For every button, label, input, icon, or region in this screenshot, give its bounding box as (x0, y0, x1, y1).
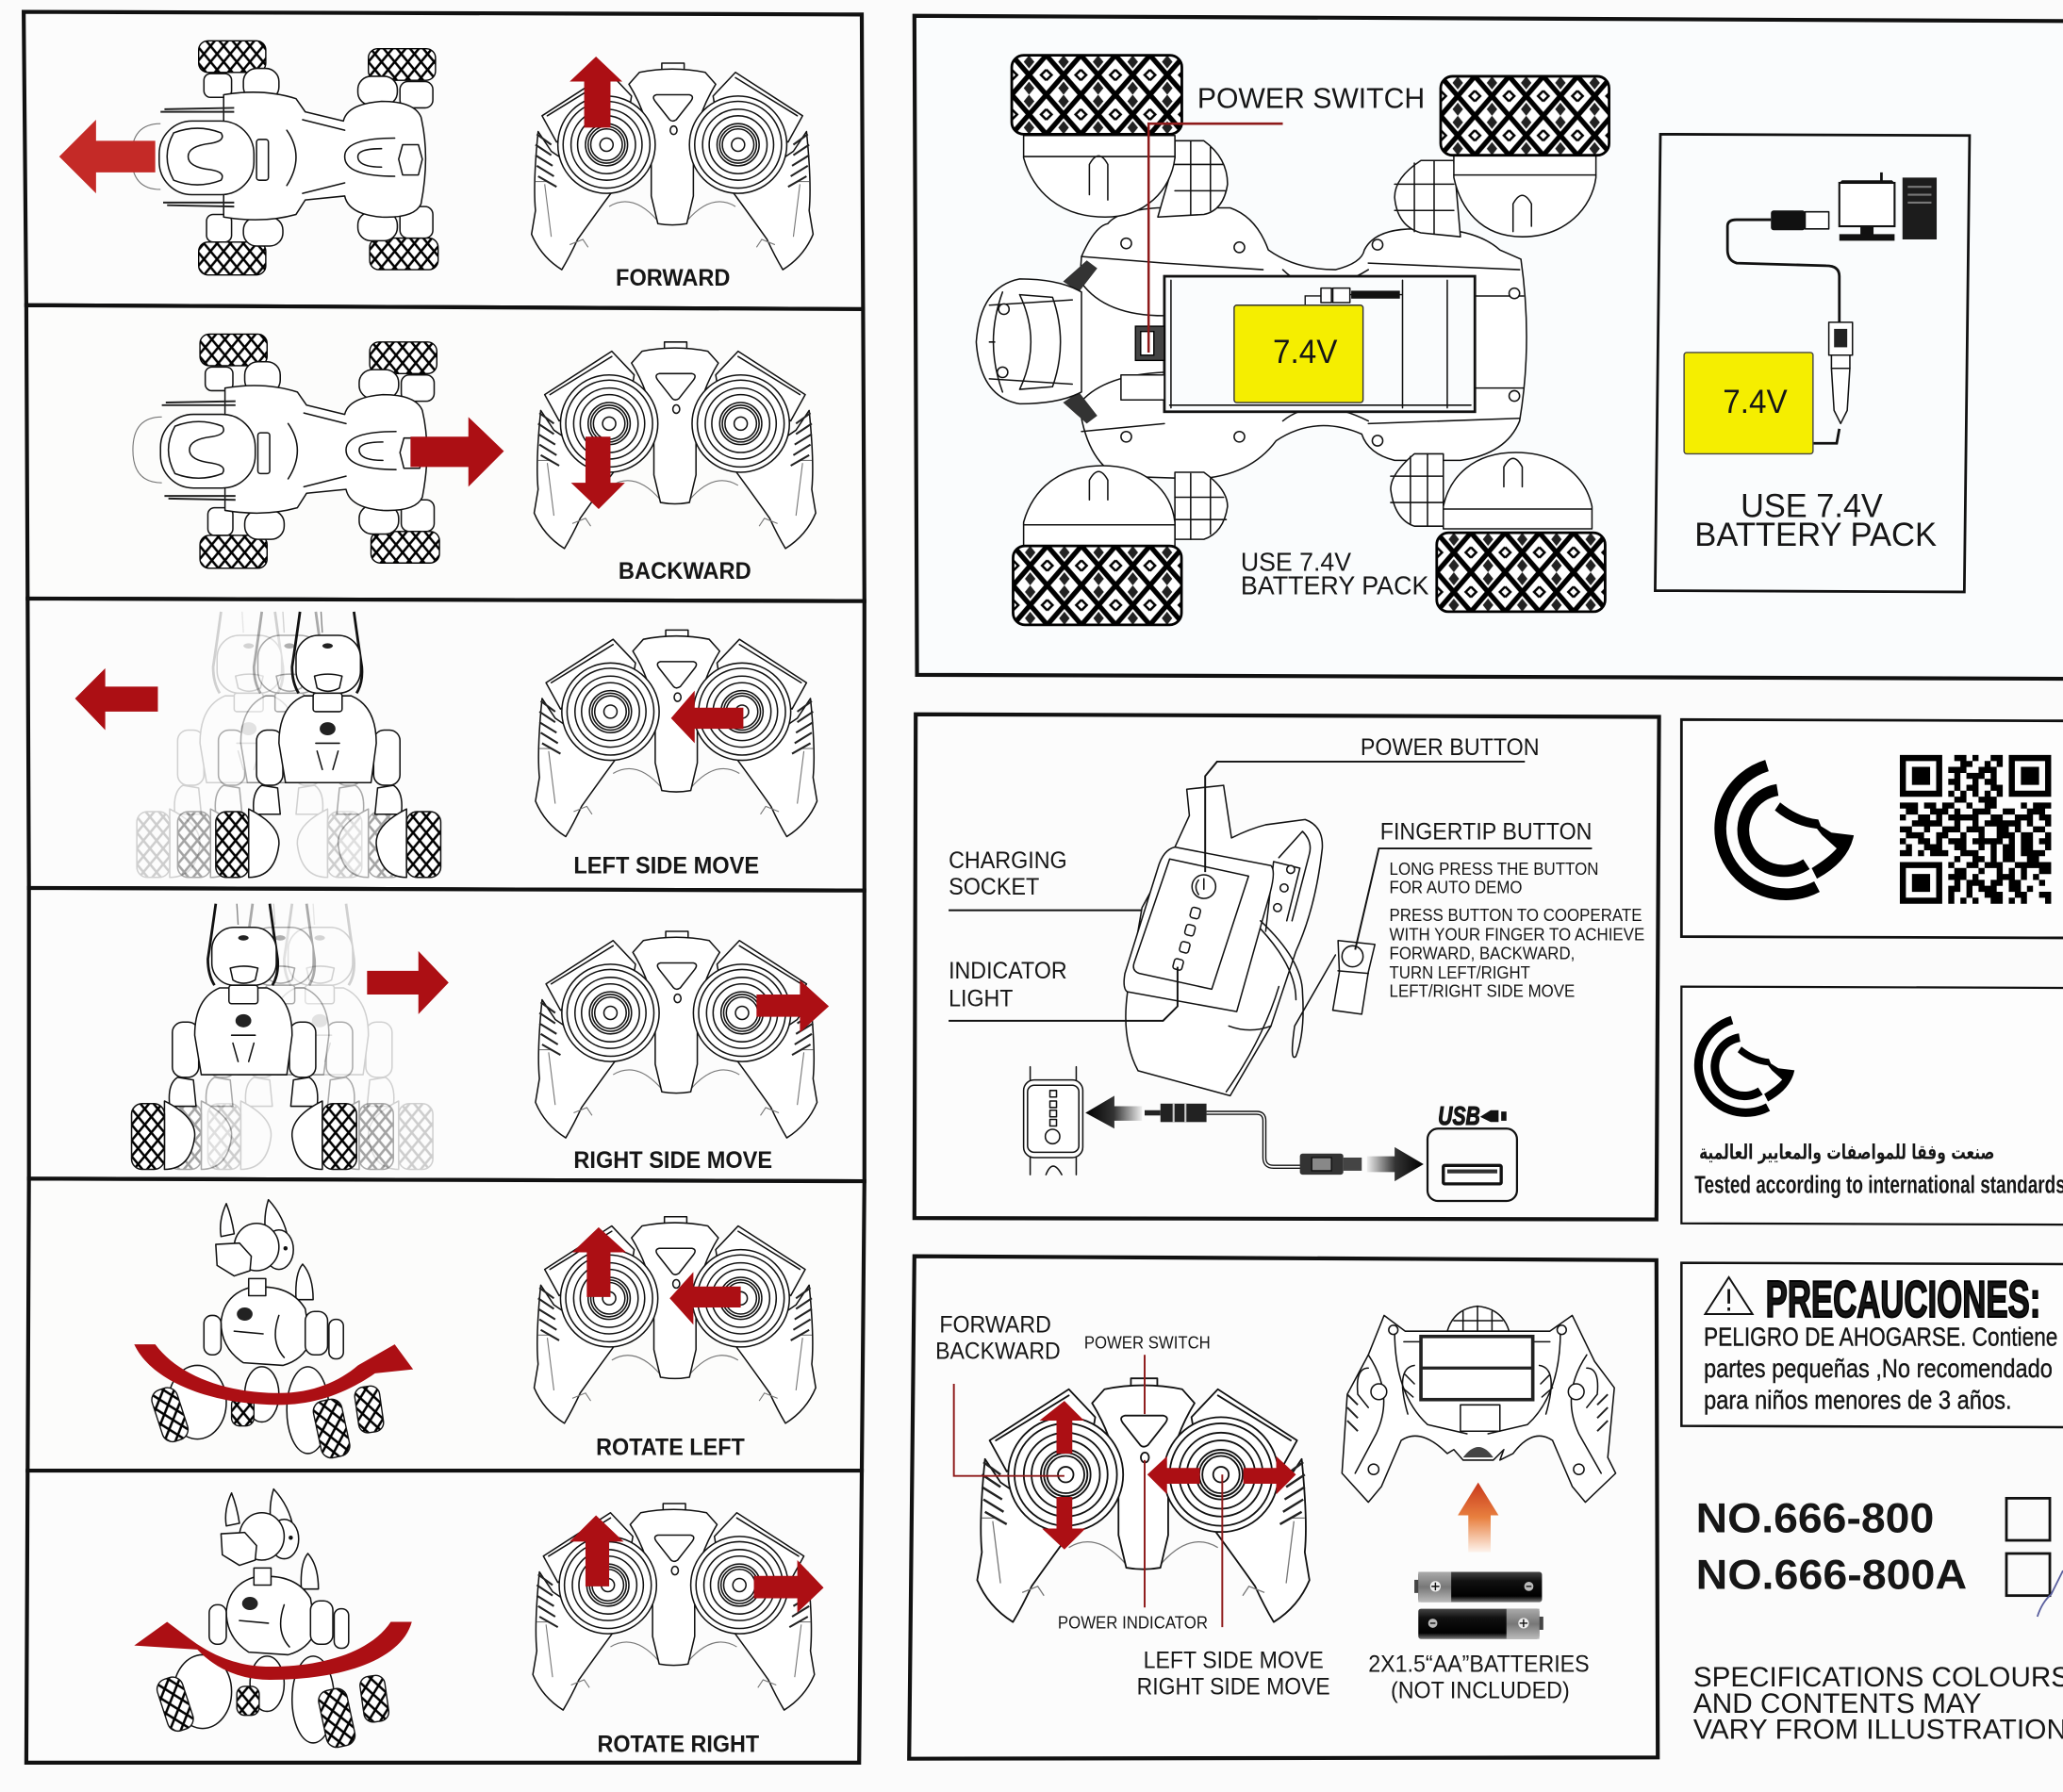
fingertip instructions: TURN LEFT/RIGHT (1390, 963, 1530, 982)
arrow: curved rotate right (134, 1622, 412, 1680)
arabic standards text: صنعت وفقا للمواصفات والمعايير العالمية (1699, 1142, 1994, 1164)
label indicator light: INDICATOR (949, 958, 1067, 984)
inset panel: usb charging (1655, 134, 1970, 592)
label indicator light (949, 958, 1178, 1021)
label use 7.4V battery pack (1241, 548, 1429, 600)
logo small (1698, 1020, 1794, 1112)
arrow: to usb port (1367, 1147, 1424, 1181)
label right side move: RIGHT SIDE MOVE (573, 1147, 772, 1174)
label forward backward: BACKWARD (935, 1338, 1061, 1364)
controller rotate right (533, 1504, 815, 1710)
arrow: stick up (569, 57, 622, 127)
arrow: backward body (410, 417, 503, 486)
checkbox 666-800 (2006, 1498, 2050, 1540)
specifications disclaimer: AND CONTENTS MAY (1693, 1688, 1981, 1719)
dog front view sliding right (132, 904, 433, 1170)
label use 7.4V battery pack: USE 7.4V (1241, 548, 1351, 577)
panel: right side move (29, 888, 865, 1181)
arrow: stick up (572, 1227, 626, 1297)
label batteries (1368, 1652, 1590, 1703)
fingertip instructions (1390, 860, 1644, 1001)
label power switch: POWER SWITCH (1197, 81, 1425, 114)
charging cable (1145, 1104, 1362, 1175)
panel: battery installation (915, 16, 2063, 679)
battery charger connector (1829, 322, 1853, 423)
controller right side move (536, 931, 817, 1138)
model numbers: NO.666-800A (1696, 1553, 1967, 1599)
controller rotate left (535, 1217, 816, 1423)
dog top view moving forward (132, 41, 438, 275)
arrow: forward body (59, 120, 156, 193)
controller forward (532, 63, 813, 270)
arrow: stick right (754, 1560, 824, 1613)
label forward: FORWARD (616, 265, 730, 291)
panel: remote controller (909, 1257, 1658, 1759)
controller left side move (536, 630, 817, 836)
battery pack: 7.4V inset (1684, 353, 1813, 453)
usb port icon: USB (1438, 1101, 1480, 1130)
specifications disclaimer (1693, 1662, 2063, 1746)
label power button: POWER BUTTON (1361, 734, 1540, 761)
fingertip instructions: FOR AUTO DEMO (1390, 878, 1522, 896)
label power button (1205, 734, 1540, 872)
specifications disclaimer: VARY FROM ILLUSTRATION (1693, 1715, 2063, 1746)
arrow: right body (367, 951, 449, 1014)
dog front view sliding left (137, 612, 440, 878)
dog three-quarter view (149, 1200, 385, 1460)
label charging socket: CHARGING (949, 847, 1067, 874)
label batteries: 2X1.5“AA”BATTERIES (1368, 1652, 1590, 1678)
label use 7.4V battery pack inset (1694, 487, 1937, 553)
label left right side move: LEFT SIDE MOVE (1144, 1647, 1324, 1673)
battery pack: 7.4V (1234, 305, 1363, 403)
watch illustration (1124, 785, 1375, 1095)
label left right side move: RIGHT SIDE MOVE (1137, 1673, 1330, 1700)
label batteries: (NOT INCLUDED) (1391, 1677, 1570, 1703)
dog underside with battery (976, 56, 1609, 625)
computer icon (1840, 173, 1937, 240)
battery pack: 7.4V: 7.4V (1273, 334, 1338, 370)
label indicator light: LIGHT (949, 986, 1013, 1012)
arrow: stick right (756, 980, 829, 1032)
usb port icon (1428, 1101, 1517, 1201)
charging cable (1727, 220, 1840, 443)
arrow: stick down (571, 436, 625, 509)
panel: backward (26, 305, 865, 601)
label power switch: POWER SWITCH (1084, 1333, 1211, 1352)
qr code (1900, 758, 2051, 901)
battery pack: 7.4V inset: 7.4V (1723, 384, 1788, 420)
label left side move: LEFT SIDE MOVE (573, 853, 759, 880)
logo (1721, 765, 1854, 895)
label use 7.4V battery pack: BATTERY PACK (1241, 571, 1429, 600)
usb plug (1771, 210, 1829, 230)
panel: forward (24, 12, 863, 309)
arrow: stick left (671, 691, 743, 743)
label use 7.4V battery pack inset: BATTERY PACK (1694, 517, 1937, 553)
leader lines (954, 1355, 1222, 1627)
icon: warning triangle (1705, 1277, 1753, 1314)
label rotate left: ROTATE LEFT (596, 1434, 745, 1460)
panel: wrist controller (915, 715, 1659, 1220)
controller backward (535, 342, 816, 549)
fingertip instructions: WITH YOUR FINGER TO ACHIEVE (1390, 926, 1644, 945)
direction arrows (1039, 1401, 1296, 1550)
fingertip instructions: LONG PRESS THE BUTTON (1390, 860, 1598, 879)
dog top view moving backward (133, 334, 439, 568)
dog three-quarter view (155, 1489, 390, 1750)
fingertip instructions: PRESS BUTTON TO COOPERATE (1390, 906, 1642, 925)
panel: rotate right (26, 1471, 862, 1763)
controller front (977, 1378, 1310, 1622)
fingertip instructions: FORWARD, BACKWARD, (1390, 944, 1575, 962)
small watch charging (1024, 1067, 1082, 1175)
label fingertip button (1355, 818, 1592, 950)
label power indicator: POWER INDICATOR (1058, 1613, 1208, 1633)
label left right side move (1137, 1647, 1330, 1700)
label backward: BACKWARD (619, 558, 751, 584)
fingertip instructions: LEFT/RIGHT SIDE MOVE (1390, 982, 1575, 1001)
model numbers: NO.666-800 (1696, 1496, 1934, 1542)
panel: tested according to international standards (1681, 987, 2063, 1225)
precautions body text (1704, 1323, 2057, 1414)
checkbox 666-800A with pen mark (2006, 1554, 2063, 1617)
arrow: left body (75, 668, 157, 730)
panel: rotate left (27, 1178, 865, 1471)
label forward backward (935, 1312, 1061, 1364)
panel: left side move (27, 599, 865, 891)
panel: logo and qr code (1681, 719, 2063, 938)
batteries (1414, 1572, 1543, 1639)
arrow: stick up (569, 1516, 623, 1586)
label fingertip button: FINGERTIP BUTTON (1380, 818, 1592, 845)
power switch leader line (1148, 123, 1283, 353)
controller back (1342, 1307, 1616, 1503)
label use 7.4V battery pack inset: USE 7.4V (1741, 487, 1884, 524)
model numbers (1696, 1496, 1967, 1599)
arrow: stick left (669, 1272, 741, 1324)
arrow: to watch (1085, 1095, 1142, 1128)
label rotate right: ROTATE RIGHT (598, 1732, 760, 1758)
precautions body text: para niños menores de 3 años. (1704, 1385, 2012, 1414)
label charging socket: SOCKET (949, 874, 1039, 900)
label charging socket (949, 847, 1142, 911)
arrow: curved rotate left (134, 1344, 413, 1405)
label forward backward: FORWARD (939, 1312, 1051, 1339)
panel: precautions (1681, 1263, 2063, 1427)
arrow: batteries up (1458, 1483, 1498, 1553)
